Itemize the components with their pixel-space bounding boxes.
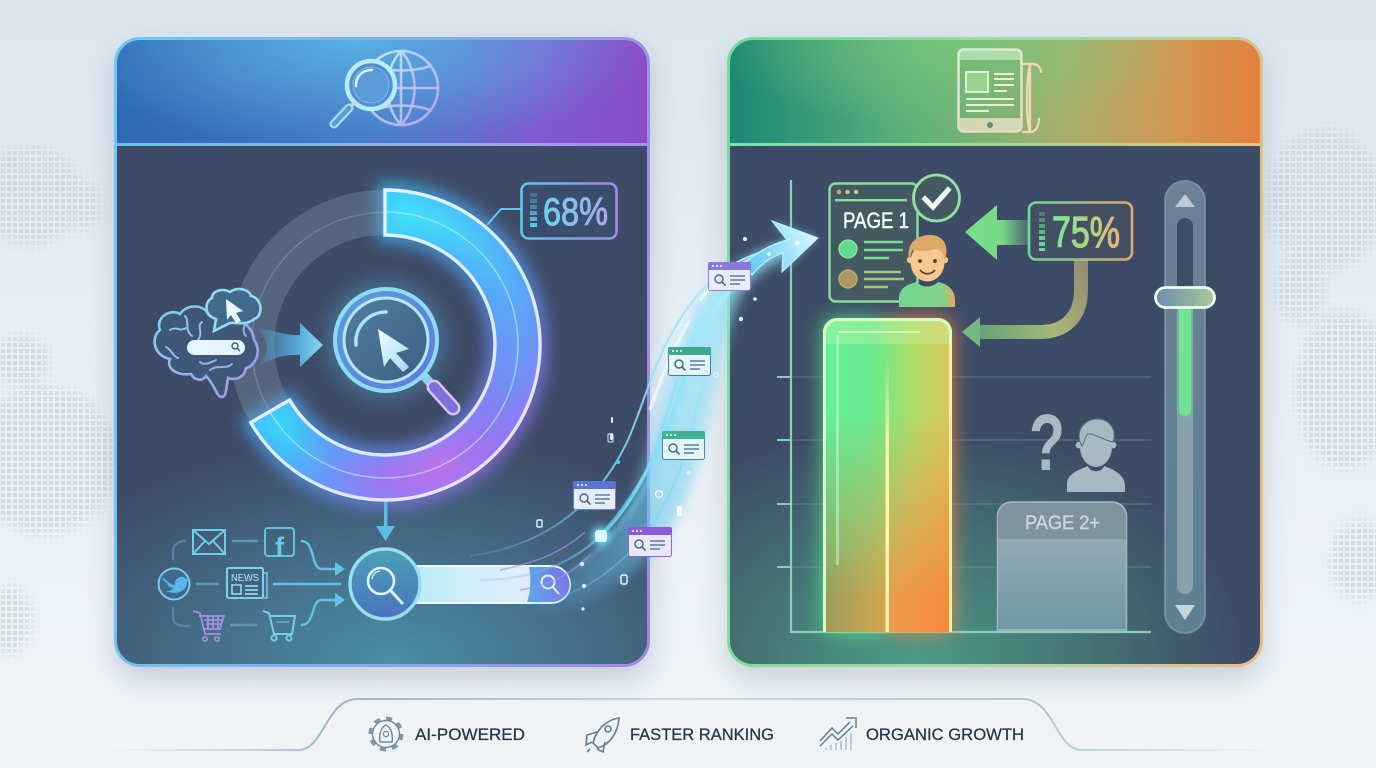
icon: envelope: [193, 530, 225, 554]
icon: blue cart: [263, 611, 295, 641]
callout: 68 percent: [487, 184, 616, 238]
label: faster ranking: FASTER RANKING: [630, 726, 774, 744]
panel body: AI search: [117, 146, 647, 664]
card: result 3: [662, 431, 705, 460]
arrowhead: [743, 221, 818, 275]
bar: page 2+: PAGE 2+: [1025, 513, 1100, 534]
search bar: [400, 566, 570, 603]
donut ring: 68 percent: [230, 190, 540, 500]
icon: growth chart: [820, 718, 856, 750]
panel header: AI search: [117, 40, 647, 143]
search circle: [350, 549, 420, 619]
ring glow: [251, 190, 540, 500]
header icon: tablet and scroll: [958, 49, 1041, 132]
bar: page 2+: [998, 502, 1126, 630]
label: AI-powered: AI-POWERED: [415, 726, 525, 744]
brain search bar: [187, 340, 245, 355]
header rule: [730, 143, 1260, 146]
icon: news: NEWS: [231, 573, 259, 584]
card: result 1: [708, 262, 751, 290]
card: page 1 window: PAGE 1: [843, 208, 909, 233]
icon: twitter: [158, 568, 190, 600]
bar: page 1: [823, 318, 952, 632]
icon: grey person: [1067, 419, 1125, 492]
connector lines to search: [173, 541, 345, 626]
arrow: stat to page 1: [965, 205, 1028, 260]
card: result 5: [628, 527, 672, 556]
icon: rocket: [586, 718, 619, 752]
magnifier with cursor: [324, 278, 453, 408]
panel: page ranking: [727, 37, 1263, 667]
right panel graphics: [777, 48, 1216, 648]
flow ribbon: [470, 245, 796, 612]
callout: 75 percent: 75%: [1052, 208, 1120, 257]
icon: check badge: [914, 175, 960, 221]
left panel graphics: [153, 49, 618, 642]
card: result 4: [573, 481, 616, 510]
floating particles: [537, 285, 757, 611]
card: page 1 window: [830, 184, 918, 302]
icon: question mark: ?: [1029, 398, 1065, 487]
icon: facebook: [265, 528, 294, 562]
header icon: magnifier and globe: [334, 51, 438, 125]
glowing node: [592, 527, 610, 545]
arrow: ring to search: [376, 502, 395, 541]
icon: brain with search bar: [155, 289, 260, 397]
panel header: page ranking: [730, 40, 1260, 143]
icon: gear: [370, 718, 402, 750]
header rule: [117, 143, 647, 146]
panel: AI search: [114, 37, 650, 667]
callout: 75 percent: [1029, 202, 1132, 260]
thought bubble: [206, 289, 260, 331]
card: result 2: [668, 347, 711, 376]
label: organic growth: ORGANIC GROWTH: [866, 726, 1024, 744]
icon: news: [227, 568, 267, 598]
icon: facebook: f: [275, 532, 285, 562]
chart axes and gridlines: [777, 180, 1151, 632]
scrollbar: [1156, 181, 1214, 633]
icon: smiling person: [899, 235, 955, 307]
arrow: brain to magnifier: [257, 323, 323, 367]
callout: 68 percent: 68%: [543, 191, 608, 234]
panel body: page ranking: [730, 146, 1260, 664]
arrow: stat to bar: [962, 260, 1081, 347]
icon: purple cart: [193, 611, 224, 641]
